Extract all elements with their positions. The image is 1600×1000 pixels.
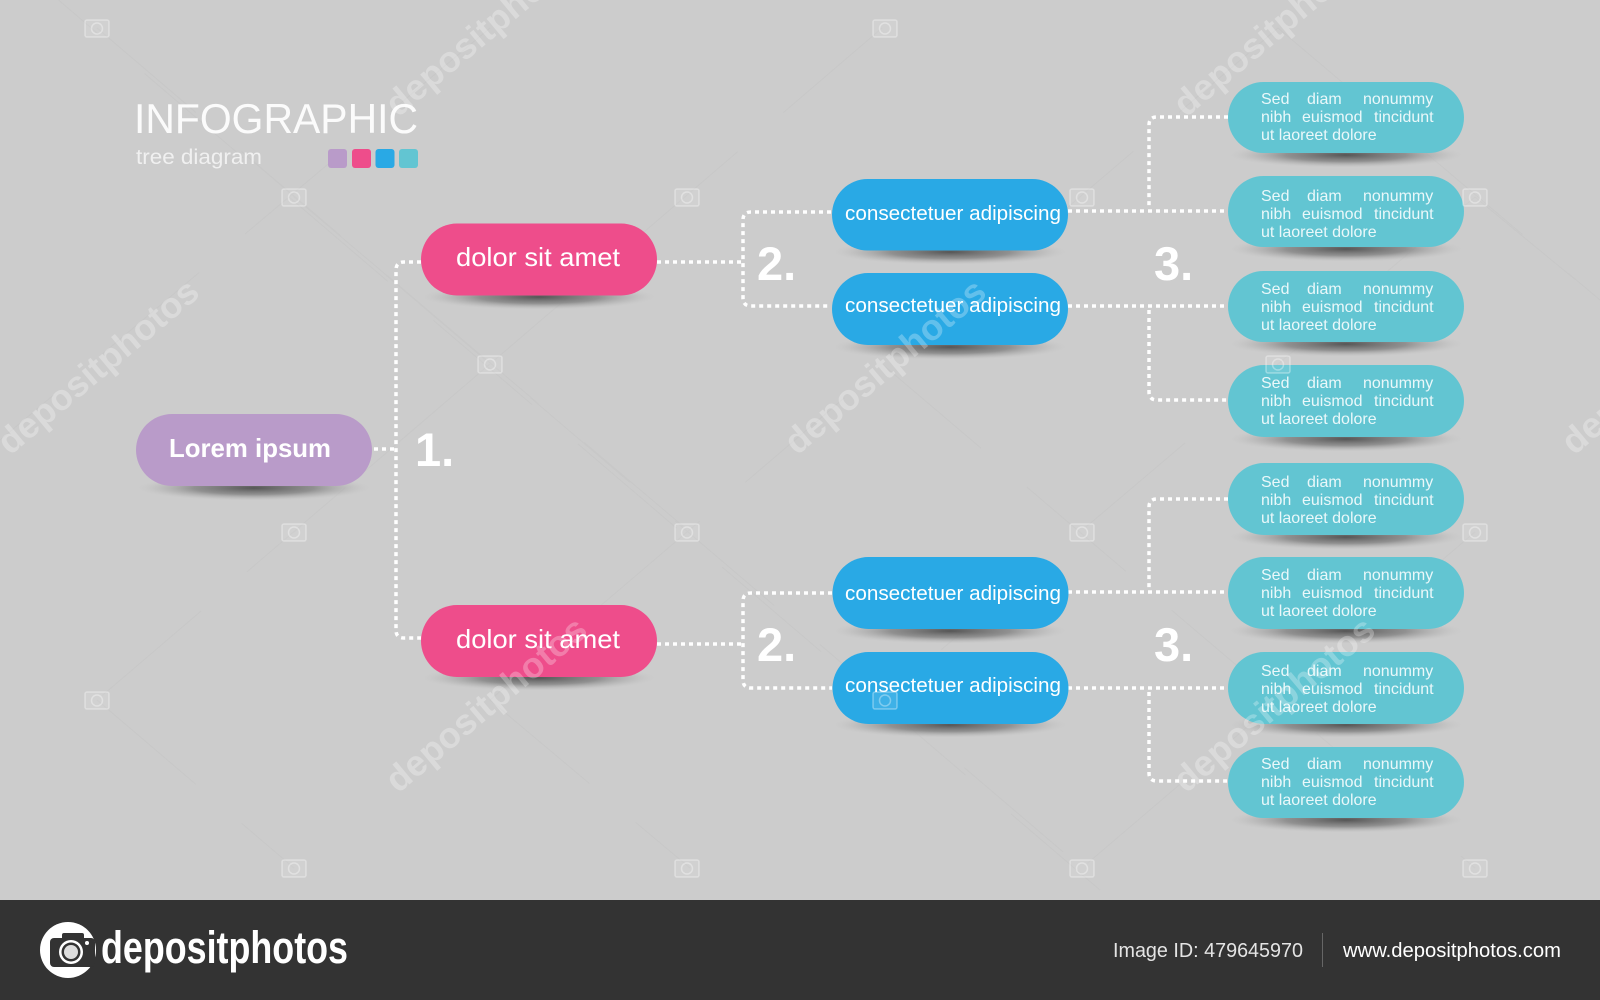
leaf node 2: diam bbox=[1307, 188, 1342, 205]
leaf node 4: euismod bbox=[1302, 393, 1362, 410]
leaf node 2: ut laoreet dolore bbox=[1261, 224, 1377, 241]
leaf node 8: nibh bbox=[1261, 774, 1291, 791]
leaf node 8: Sed bbox=[1261, 756, 1289, 773]
watermarks: depositphotos bbox=[776, 270, 994, 462]
sub node: consectetuer adipiscing 4 bbox=[830, 652, 1070, 738]
leaf node 8 bbox=[1226, 747, 1466, 833]
leaf node 1: nibh bbox=[1261, 109, 1291, 126]
leaf node 5 bbox=[1226, 463, 1466, 550]
leaf node 5: nibh bbox=[1261, 492, 1291, 509]
leaf node 8: diam bbox=[1307, 756, 1342, 773]
leaf node 7 bbox=[1226, 652, 1466, 738]
leaf node 4 bbox=[1226, 365, 1466, 452]
watermarks: depositphotos bbox=[377, 608, 595, 800]
sub node: consectetuer adipiscing 2: consectetuer adipiscing bbox=[845, 295, 1061, 317]
leaf node 3: euismod bbox=[1302, 299, 1362, 316]
leaf node 4: ut laoreet dolore bbox=[1261, 411, 1377, 428]
leaf node 7: Sed bbox=[1261, 663, 1289, 680]
leaf node 6: euismod bbox=[1302, 585, 1362, 602]
number 2 upper: 2. bbox=[757, 237, 796, 290]
leaf node 5: tincidunt bbox=[1374, 492, 1434, 509]
sub node: consectetuer adipiscing 3 bbox=[830, 557, 1070, 644]
leaf node 4: nibh bbox=[1261, 393, 1291, 410]
leaf node 7: diam bbox=[1307, 663, 1342, 680]
leaf node 7: nibh bbox=[1261, 681, 1291, 698]
leaf node 5: nonummy bbox=[1363, 474, 1433, 491]
footer logo wordmark: depositphotos bbox=[101, 922, 348, 973]
leaf node 4: nonummy bbox=[1363, 375, 1433, 392]
leaf node 7: nonummy bbox=[1363, 663, 1433, 680]
watermark camera icons bbox=[85, 20, 1487, 877]
connectors: dotted tree lines bbox=[374, 117, 1228, 781]
number 1: 1. bbox=[415, 423, 454, 476]
leaf node 5: ut laoreet dolore bbox=[1261, 510, 1377, 527]
leaf node 1 bbox=[1226, 82, 1466, 168]
leaf node 5: diam bbox=[1307, 474, 1342, 491]
sub node: consectetuer adipiscing 1 bbox=[830, 179, 1070, 265]
leaf node 3: ut laoreet dolore bbox=[1261, 317, 1377, 334]
leaf node 3: nibh bbox=[1261, 299, 1291, 316]
number 3 upper: 3. bbox=[1154, 237, 1193, 290]
branch node: dolor sit amet lower bbox=[419, 605, 659, 691]
watermarks: depositphotos bbox=[1165, 608, 1383, 800]
leaf node 8: ut laoreet dolore bbox=[1261, 792, 1377, 809]
footer image id: Image ID: 479645970 bbox=[1113, 940, 1303, 962]
root node: Lorem ipsum bbox=[134, 414, 374, 501]
sub node: consectetuer adipiscing 3: consectetuer adipiscing bbox=[845, 583, 1061, 605]
subtitle: tree diagram bbox=[136, 146, 262, 169]
leaf node 3: nonummy bbox=[1363, 281, 1433, 298]
leaf node 6: Sed bbox=[1261, 567, 1289, 584]
leaf node 5: euismod bbox=[1302, 492, 1362, 509]
sub node: consectetuer adipiscing 4: consectetuer adipiscing bbox=[845, 675, 1061, 697]
leaf node 8: nonummy bbox=[1363, 756, 1433, 773]
leaf node 6 bbox=[1226, 557, 1466, 644]
leaf node 7: tincidunt bbox=[1374, 681, 1434, 698]
number 3 lower: 3. bbox=[1154, 618, 1193, 671]
leaf node 3: diam bbox=[1307, 281, 1342, 298]
footer bar bbox=[0, 900, 1600, 1000]
leaf node 4: diam bbox=[1307, 375, 1342, 392]
leaf node 1: tincidunt bbox=[1374, 109, 1434, 126]
root node: Lorem ipsum: Lorem ipsum bbox=[169, 433, 331, 463]
leaf node 6: nibh bbox=[1261, 585, 1291, 602]
leaf node 2: euismod bbox=[1302, 206, 1362, 223]
footer logo icon: camera bbox=[40, 922, 96, 978]
leaf node 8: euismod bbox=[1302, 774, 1362, 791]
footer website: www.depositphotos.com bbox=[1342, 940, 1561, 962]
leaf node 2: nibh bbox=[1261, 206, 1291, 223]
branch node: dolor sit amet upper bbox=[419, 224, 659, 310]
leaf node 5: Sed bbox=[1261, 474, 1289, 491]
leaf node 1: nonummy bbox=[1363, 91, 1433, 108]
title: INFOGRAPHIC bbox=[134, 95, 418, 142]
leaf node 2 bbox=[1226, 176, 1466, 262]
leaf node 2: nonummy bbox=[1363, 188, 1433, 205]
leaf node 1: ut laoreet dolore bbox=[1261, 127, 1377, 144]
leaf node 7: ut laoreet dolore bbox=[1261, 699, 1377, 716]
leaf node 1: diam bbox=[1307, 91, 1342, 108]
leaf node 6: diam bbox=[1307, 567, 1342, 584]
branch node: dolor sit amet upper: dolor sit amet bbox=[456, 242, 621, 272]
leaf node 3: tincidunt bbox=[1374, 299, 1434, 316]
leaf node 1: Sed bbox=[1261, 91, 1289, 108]
leaf node 3: Sed bbox=[1261, 281, 1289, 298]
sub node: consectetuer adipiscing 2 bbox=[830, 273, 1070, 360]
leaf node 3 bbox=[1226, 271, 1466, 357]
leaf node 6: ut laoreet dolore bbox=[1261, 603, 1377, 620]
leaf node 2: tincidunt bbox=[1374, 206, 1434, 223]
leaf node 1: euismod bbox=[1302, 109, 1362, 126]
leaf node 7: euismod bbox=[1302, 681, 1362, 698]
leaf node 6: tincidunt bbox=[1374, 585, 1434, 602]
leaf node 4: tincidunt bbox=[1374, 393, 1434, 410]
leaf node 2: Sed bbox=[1261, 188, 1289, 205]
legend swatches bbox=[328, 149, 418, 168]
leaf node 6: nonummy bbox=[1363, 567, 1433, 584]
leaf node 8: tincidunt bbox=[1374, 774, 1434, 791]
branch node: dolor sit amet lower: dolor sit amet bbox=[456, 624, 621, 654]
number 2 lower: 2. bbox=[757, 618, 796, 671]
sub node: consectetuer adipiscing 1: consectetuer adipiscing bbox=[845, 203, 1061, 225]
leaf node 4: Sed bbox=[1261, 375, 1289, 392]
